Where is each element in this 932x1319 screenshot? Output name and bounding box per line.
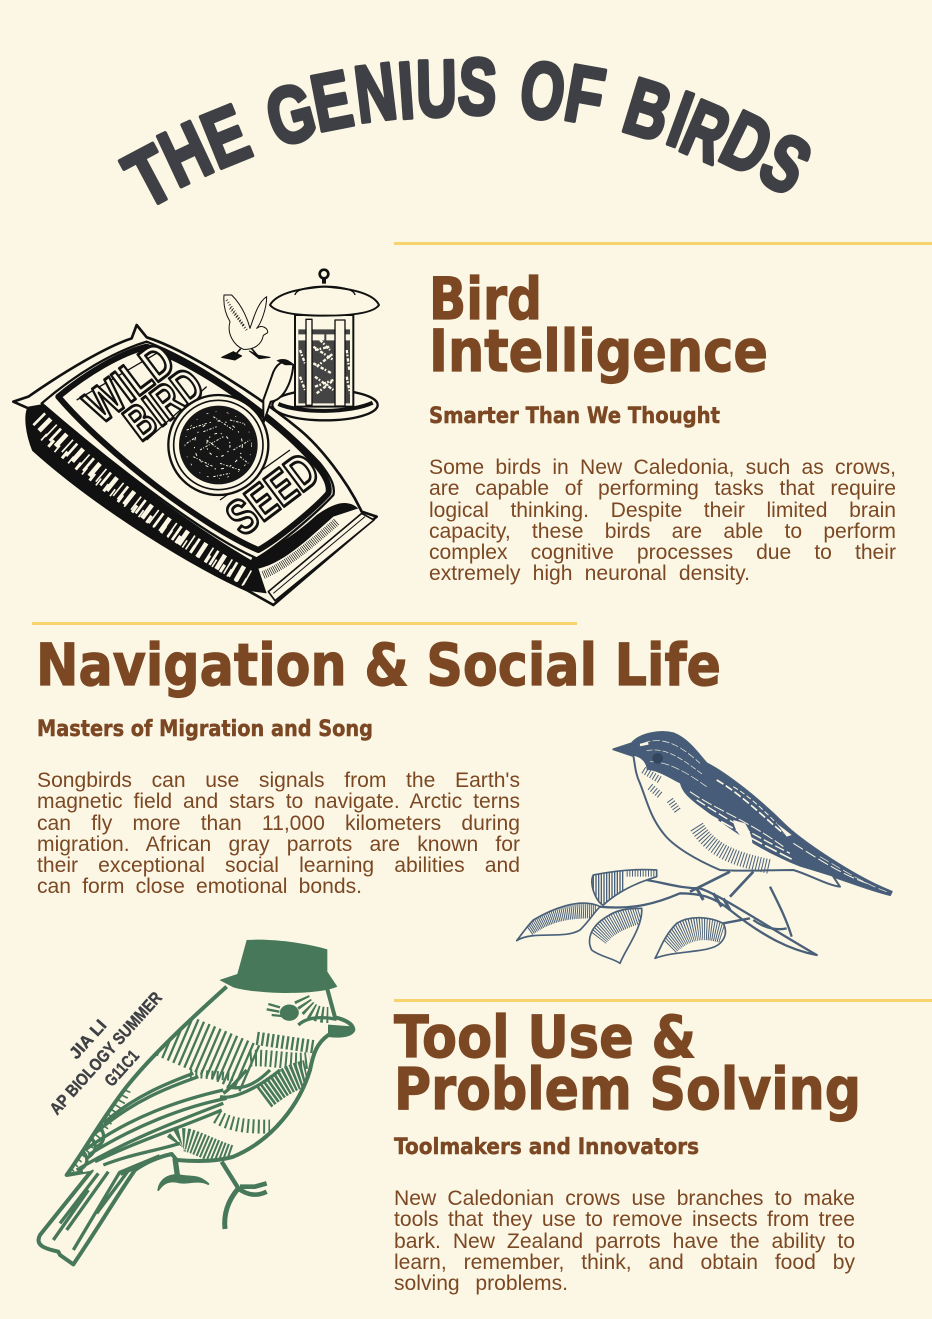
body text: bird intelligence: capacity, these birds are able to perform (429, 520, 896, 543)
title: G (257, 65, 325, 163)
flying bird (222, 295, 270, 360)
subheading: Masters of Migration and Song (37, 717, 373, 742)
title: I (395, 45, 417, 136)
body text: tool use: bark. New Zealand parrots have the ability to (394, 1230, 855, 1253)
body text: tool use: New Caledonian crows use branches to make (394, 1187, 855, 1210)
illustration: green bird with bucket hat (36, 940, 356, 1266)
title: N (350, 45, 401, 140)
branch and leaves (517, 870, 817, 963)
body text: bird intelligence: are capable of performing tasks that require (429, 477, 896, 500)
title: R (670, 82, 742, 181)
heading: tool use and problem solving: Problem Solving (394, 1055, 861, 1123)
bag wording: WILD (74, 332, 185, 434)
body text: bird intelligence: logical thinking. Despite their limited brain (429, 499, 896, 522)
title: T (111, 128, 188, 226)
illustration: blue songbird on branch (516, 731, 893, 964)
author credit: AP BIOLOGY SUMMER (46, 988, 166, 1118)
bag wording (74, 332, 329, 546)
body text: navigation: magnetic field and stars to navigate. Arctic terns (37, 790, 520, 813)
heading: bird intelligence (429, 265, 768, 429)
perched bird (263, 359, 293, 423)
author credit: G11C1 (101, 1046, 143, 1090)
body text: bird intelligence (429, 456, 896, 585)
body text: tool use (394, 1187, 855, 1295)
subheading: Toolmakers and Innovators (394, 1135, 699, 1160)
title: H (147, 105, 225, 205)
rule: section two (32, 622, 577, 625)
body text: bird intelligence: extremely high neuronal density. (429, 562, 750, 585)
body text: tool use: learn, remember, think, and obtain food by (394, 1251, 855, 1274)
heading: tool use and problem solving (394, 1003, 861, 1160)
feeder (270, 270, 379, 420)
bag wording: BIRD (114, 357, 214, 451)
body text: tool use: tools that they use to remove insects from tree (394, 1208, 855, 1231)
title: E (304, 53, 359, 149)
feather hatching (67, 1030, 313, 1173)
body text: navigation: their exceptional social learning abilities and (37, 854, 520, 877)
title: U (416, 43, 458, 134)
body text: bird intelligence: Some birds in New Caledonia, such as crows, (429, 456, 896, 479)
title: F (559, 49, 611, 143)
body text: navigation: migration. African gray parrots are known for (37, 833, 520, 856)
illustration: wild bird seed bag with feeder (12, 268, 380, 606)
bag wording: SEED (216, 442, 329, 546)
bird body (613, 732, 892, 897)
body text: tool use: solving problems. (394, 1272, 568, 1295)
heading: bird intelligence: Bird (429, 265, 542, 333)
title: E (191, 89, 262, 186)
body text: navigation: Songbirds can use signals from the Earth's (37, 769, 520, 792)
title: B (615, 60, 682, 159)
legs (158, 1158, 267, 1229)
title: D (708, 93, 786, 193)
heading: tool use and problem solving: Tool Use & (394, 1003, 696, 1071)
hat (219, 940, 337, 993)
heading: bird intelligence: Intelligence (429, 317, 768, 385)
title: I (658, 74, 703, 164)
heading: navigation and social life: Navigation & Social Life (36, 631, 721, 699)
rule: section three (394, 999, 932, 1002)
rule: section one (394, 242, 932, 245)
title: S (456, 41, 499, 132)
eye (267, 998, 352, 1035)
author credit: JIA LI (65, 1016, 110, 1063)
body text: bird intelligence: complex cognitive processes due to their (429, 541, 896, 564)
body outline (39, 987, 353, 1264)
title: O (515, 43, 571, 138)
subheading: Smarter Than We Thought (429, 404, 720, 429)
seed window (168, 395, 268, 495)
title: S (745, 115, 826, 212)
bag body (13, 325, 377, 605)
heading: navigation and social life (36, 631, 721, 742)
body text: navigation: can fly more than 11,000 kilometers during (37, 812, 520, 835)
body text: navigation (37, 769, 520, 898)
title (111, 41, 826, 226)
body text: navigation: can form close emotional bonds. (37, 875, 362, 898)
